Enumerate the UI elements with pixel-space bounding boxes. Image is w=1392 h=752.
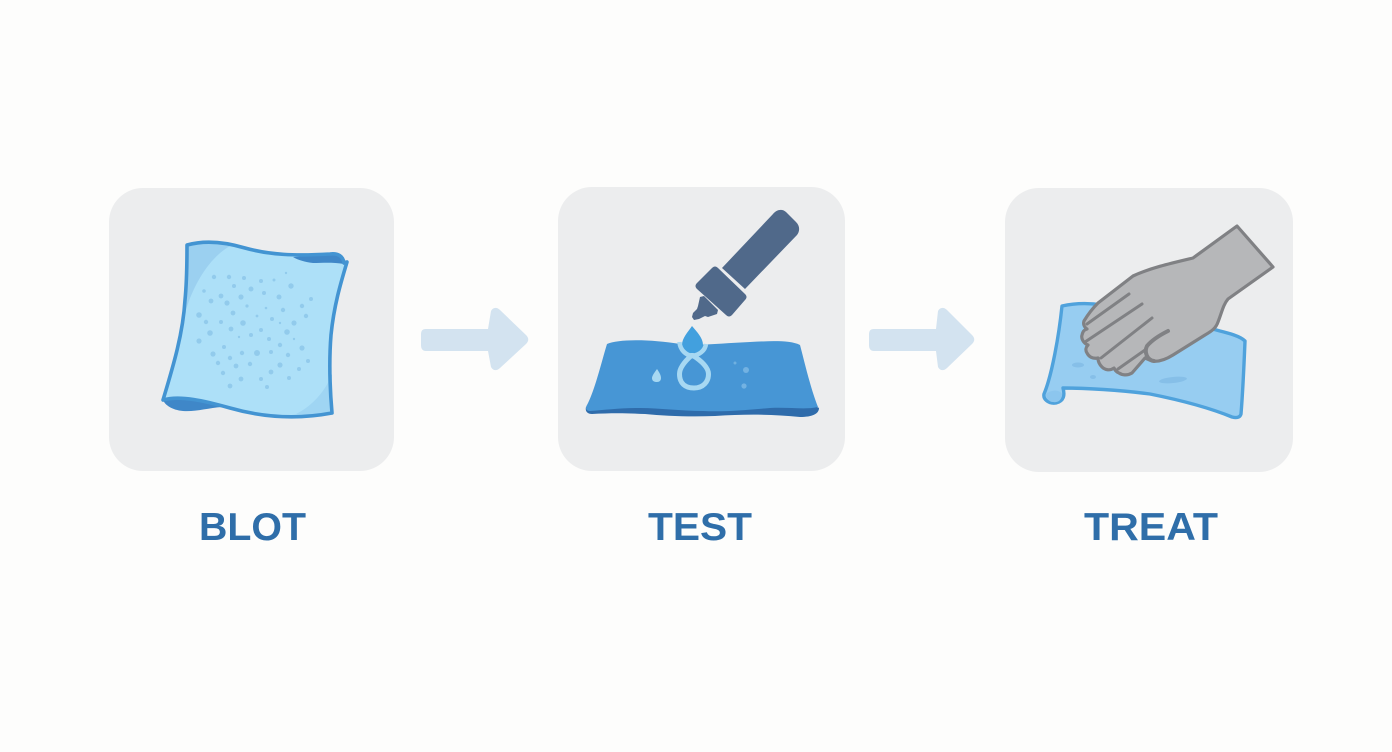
label: test: TEST [648,506,752,549]
stain dots [196,272,313,389]
icon: soaked fabric [586,326,819,417]
panel: treat [1005,188,1293,472]
droplet mark on fabric [680,355,708,388]
arrow: blot to test [421,308,528,370]
arrow: test to treat [869,308,974,370]
icon: gray hand [1082,226,1273,375]
icon: blotting cloth [163,242,347,417]
panel: blot [109,188,394,471]
icon: dropper bottle [692,210,799,320]
icon: cloth under hand [1044,304,1245,418]
panel: test [558,187,845,471]
label: treat: TREAT [1084,506,1218,549]
label: blot: BLOT [199,506,306,549]
